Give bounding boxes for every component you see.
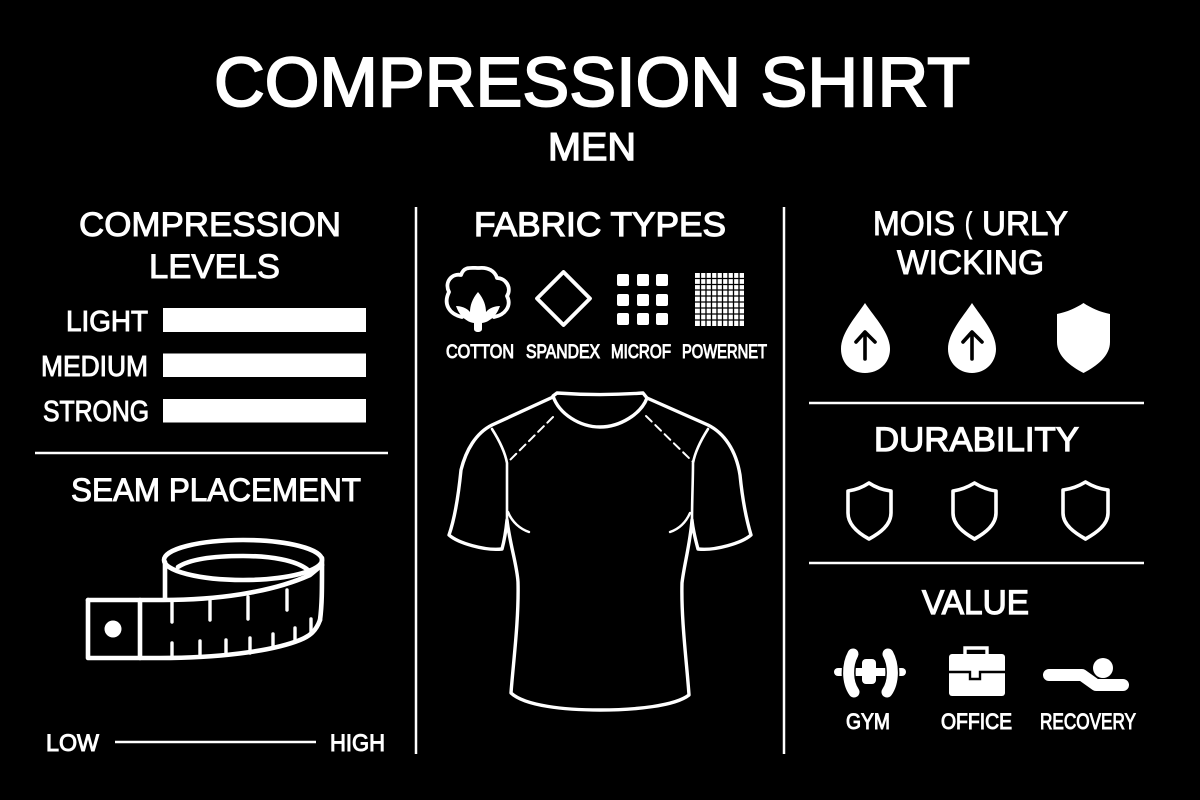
icon: solid shield — [1057, 303, 1110, 373]
fabric labels: MICROF — [611, 342, 671, 363]
icon: recovery resting figure — [1049, 658, 1123, 685]
heading: moisture wicking: WICKING — [897, 244, 1044, 282]
icon: spandex — [537, 272, 590, 325]
compression level bars: MEDIUM — [41, 351, 148, 383]
compression level bars: LIGHT — [66, 306, 148, 338]
fabric labels — [446, 342, 767, 363]
heading: seam placement: SEAM PLACEMENT — [71, 472, 361, 508]
subtitle: MEN — [548, 126, 636, 169]
icon: water drop with arrow — [948, 303, 996, 373]
value labels: RECOVERY — [1040, 709, 1136, 734]
icon: cotton — [447, 268, 509, 332]
fabric labels: COTTON — [446, 342, 514, 363]
durability shields — [848, 482, 1108, 539]
value labels: GYM — [846, 709, 890, 734]
compression level bars: STRONG — [43, 396, 149, 428]
icon: gym dumbbell — [838, 654, 902, 692]
value labels: OFFICE — [941, 709, 1012, 734]
icon: office briefcase — [949, 648, 1005, 696]
panel: left column — [35, 206, 388, 757]
heading: compression levels: LEVELS — [149, 248, 280, 286]
icon: powernet — [695, 273, 744, 326]
title: COMPRESSION SHIRT — [214, 43, 970, 121]
panel: right column — [809, 205, 1144, 734]
compression level bars — [41, 306, 366, 428]
heading: moisture wicking: ( — [965, 207, 972, 240]
scale: low to high: LOW — [46, 730, 99, 757]
panel: fabric types — [446, 206, 767, 710]
icon: measuring tape — [88, 540, 322, 658]
icon: microfiber — [617, 274, 668, 325]
heading: moisture wicking — [873, 205, 1068, 282]
fabric labels: POWERNET — [682, 342, 767, 363]
scale: low to high: HIGH — [330, 730, 385, 757]
scale: low to high — [46, 730, 385, 757]
heading: value: VALUE — [922, 584, 1029, 622]
heading: compression levels: COMPRESSION — [79, 206, 341, 244]
value labels — [846, 709, 1136, 734]
icon: water drop with arrow — [841, 303, 890, 373]
fabric labels: SPANDEX — [526, 342, 600, 363]
heading: compression levels — [79, 206, 341, 286]
heading: fabric types: FABRIC TYPES — [474, 206, 726, 244]
heading: moisture wicking: MOIS — [873, 205, 955, 243]
heading: durability: DURABILITY — [874, 421, 1079, 459]
heading: moisture wicking: URLY — [982, 205, 1068, 243]
illustration: compression shirt — [449, 393, 751, 710]
